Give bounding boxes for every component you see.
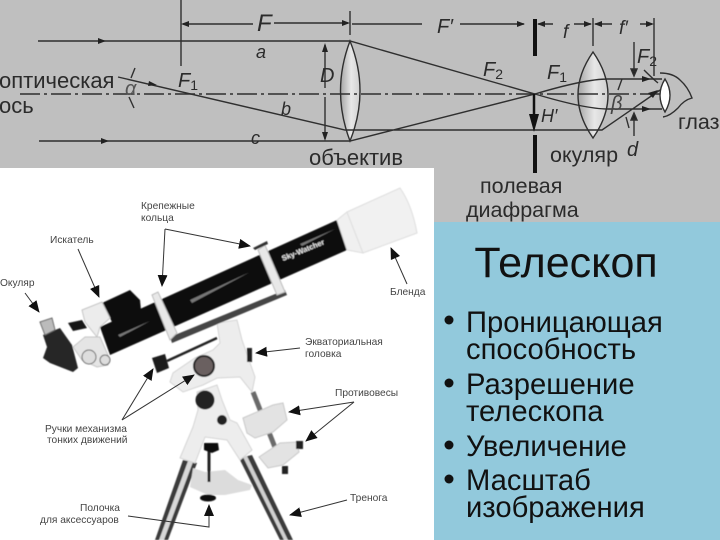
label: F: F [257, 10, 273, 37]
diagram labels: F [483, 59, 495, 81]
diagram labels: объектив [309, 145, 403, 170]
callouts: Экваториальная [305, 337, 383, 348]
optical ray diagram [20, 0, 692, 173]
tube ring 1 [152, 292, 177, 340]
dimension arrows [183, 23, 652, 139]
callouts [0, 201, 426, 526]
diagram labels: F [178, 70, 190, 92]
bullet list: Разрешение [466, 369, 635, 401]
diagram labels: f′ [619, 18, 629, 39]
diagram labels: c [251, 128, 260, 148]
diagram labels: 2 [495, 66, 503, 82]
diagram labels: F′ [437, 16, 454, 38]
counterweight bolts [282, 441, 303, 474]
shelf hub [200, 494, 216, 502]
tripod legs [155, 455, 293, 540]
dovetail bar [170, 290, 287, 343]
eye lens [660, 79, 670, 112]
bullet list: Увеличение [466, 431, 627, 463]
bullet list: телескопа [466, 396, 604, 428]
diagram labels: H′ [541, 106, 558, 126]
image height arrowhead [529, 114, 539, 132]
diagram labels: α [125, 78, 137, 100]
diagram labels: оптическая [0, 68, 114, 93]
callout labels: Крепежные [141, 201, 195, 212]
diagram labels: F [547, 62, 559, 84]
lower pier [180, 385, 252, 463]
background: optics panel [0, 0, 720, 222]
callouts: Ручки механизма [45, 424, 127, 435]
ring clamp [253, 241, 268, 250]
eyepiece lens [578, 52, 608, 138]
image height arrow [533, 94, 535, 120]
callout arrows [25, 229, 407, 527]
central rod and knob [208, 450, 210, 482]
bullet list [444, 307, 663, 524]
diagram labels: диафрагма [466, 198, 579, 222]
callouts: Окуляр [0, 278, 35, 289]
field stop [533, 19, 537, 173]
accessory shelf [190, 468, 252, 495]
finder eyepiece [68, 320, 87, 331]
rear cell [73, 337, 108, 367]
eyepiece barrel [40, 318, 55, 335]
heading: Телескоп [474, 239, 658, 287]
diagram labels: ось [0, 93, 34, 118]
mount dials [194, 356, 214, 376]
callouts: Полочка [80, 503, 120, 514]
callouts: кольца [141, 213, 174, 224]
callouts: головка [305, 349, 342, 360]
bullet list: Проницающая [466, 307, 663, 339]
diagram labels: глаз [678, 110, 720, 134]
callouts: Искатель [50, 235, 94, 246]
diagram labels: D [320, 65, 334, 87]
diagram labels: b [281, 99, 291, 119]
ray arrowheads [98, 38, 658, 144]
diagram labels: a [256, 42, 266, 62]
bullet list: Масштаб [466, 465, 591, 497]
main tube [100, 220, 347, 355]
diagram labels: полевая [480, 174, 562, 198]
diagram labels: 1 [190, 77, 198, 93]
callouts: Противовесы [335, 388, 398, 399]
panel: telescope photo [0, 168, 434, 540]
focal plane and lens ticks [181, 0, 654, 76]
tube ring 2 [258, 245, 285, 295]
slow-motion knob [152, 354, 169, 373]
panel: summary [434, 222, 720, 540]
diagram labels: 1 [559, 69, 567, 85]
diagram labels [0, 10, 720, 222]
diagram labels: 2 [649, 53, 657, 69]
collar [337, 212, 363, 253]
counterweight rod [253, 392, 280, 460]
star diagonal [43, 328, 78, 372]
counterweight 2 [259, 442, 299, 468]
bullet list: изображения [466, 492, 645, 524]
diagram labels: F [637, 46, 649, 68]
exit pupil pointers [129, 42, 637, 136]
callouts: тонких движений [47, 435, 127, 446]
upper mount head [170, 320, 255, 392]
callouts: для аксессуаров [40, 515, 119, 526]
rays [38, 41, 662, 141]
telescope illustration [40, 188, 417, 540]
callouts: Бленда [390, 287, 426, 298]
finder white bracket [82, 302, 110, 337]
optical axis [20, 93, 660, 95]
diagram labels: окуляр [550, 143, 618, 167]
dimension arrowheads [181, 20, 654, 141]
finder scope [102, 290, 141, 322]
objective lens [340, 41, 360, 141]
eye [644, 70, 692, 117]
diagram labels: d [627, 139, 639, 161]
dew shield [347, 188, 417, 253]
counterweight 1 [243, 403, 287, 438]
tube highlights [118, 229, 335, 337]
head knob [247, 348, 252, 362]
brand label: Sky-Watcher [280, 238, 326, 263]
diagram labels: f [563, 22, 570, 43]
focuser knobs [82, 350, 96, 364]
bullet list: способность [466, 334, 636, 366]
knob rod [167, 338, 217, 361]
diagram labels: β [610, 93, 622, 115]
callouts: Тренога [350, 493, 388, 504]
